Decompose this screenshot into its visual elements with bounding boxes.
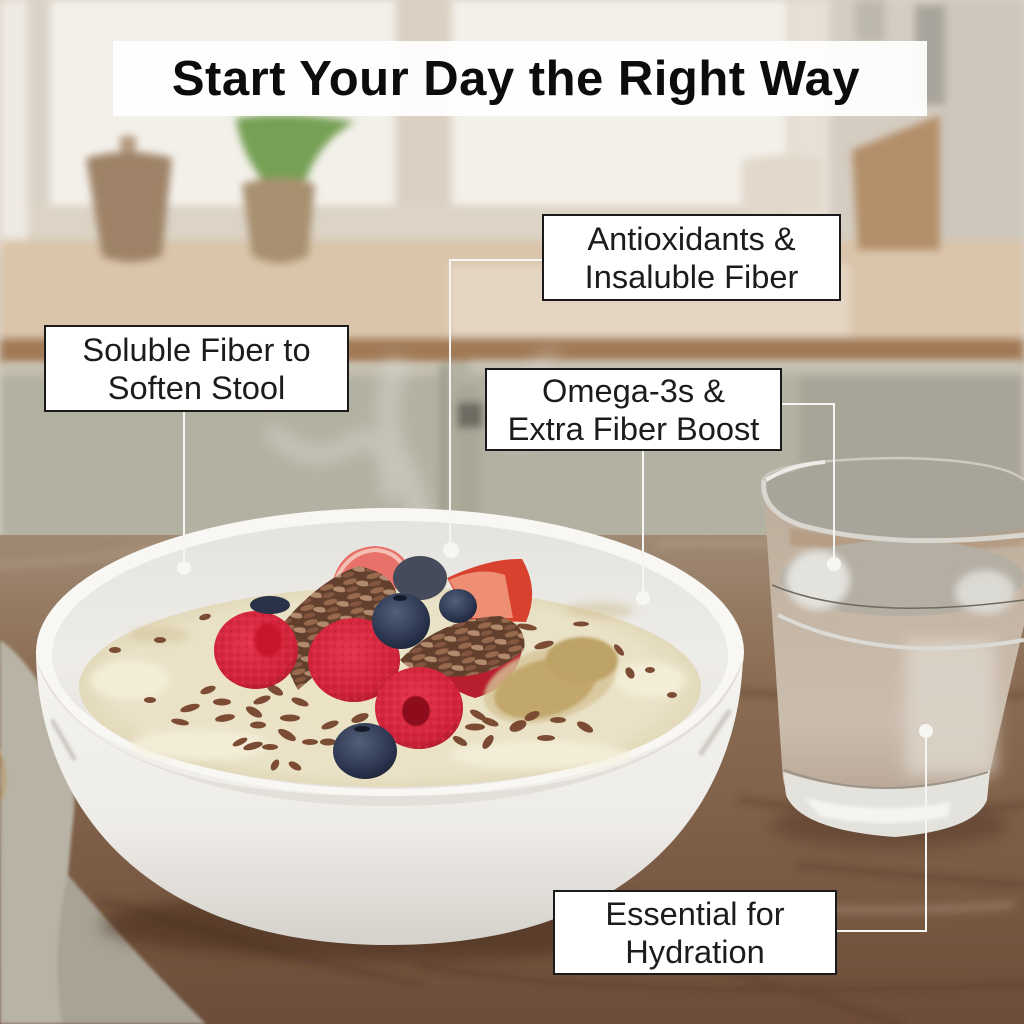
glass body [763,460,1024,837]
label: omega-3s [485,368,782,451]
napkin [0,640,206,1024]
connector: soluble fiber [177,412,191,575]
label: hydration [553,890,837,975]
strawberries [332,546,532,698]
steam [270,350,555,550]
flax seeds on top [109,566,677,773]
connector: omega-3s [636,451,650,605]
table [0,535,1024,1024]
cabinets [0,360,1024,542]
bowl [36,508,744,960]
label: hydration: Hydration [625,932,765,970]
label: soluble fiber [44,325,349,412]
label: antioxidants: Insaluble Fiber [585,258,798,294]
label: antioxidants [542,214,841,301]
background plants and pots [86,0,945,263]
label: hydration: Essential for [605,894,785,932]
background: kitchen scene [0,0,1024,545]
counter [0,240,1024,365]
label: antioxidants: Antioxidants & [587,220,796,256]
oatmeal [79,587,701,787]
label: soluble fiber: Soften Stool [108,368,285,406]
title [113,41,927,116]
connector: omega-3s to water [781,404,841,571]
raspberries [214,611,463,749]
label: omega-3s: Extra Fiber Boost [508,410,759,446]
label: omega-3s: Omega-3s & [542,372,725,408]
label: soluble fiber: Soluble Fiber to [82,330,311,368]
glass of water [763,458,1024,847]
connector: antioxidants [443,260,543,558]
title: Start Your Day the Right Way [172,52,860,106]
blueberries [250,556,477,779]
ground flax powder [475,631,625,737]
connector: hydration [836,724,933,931]
